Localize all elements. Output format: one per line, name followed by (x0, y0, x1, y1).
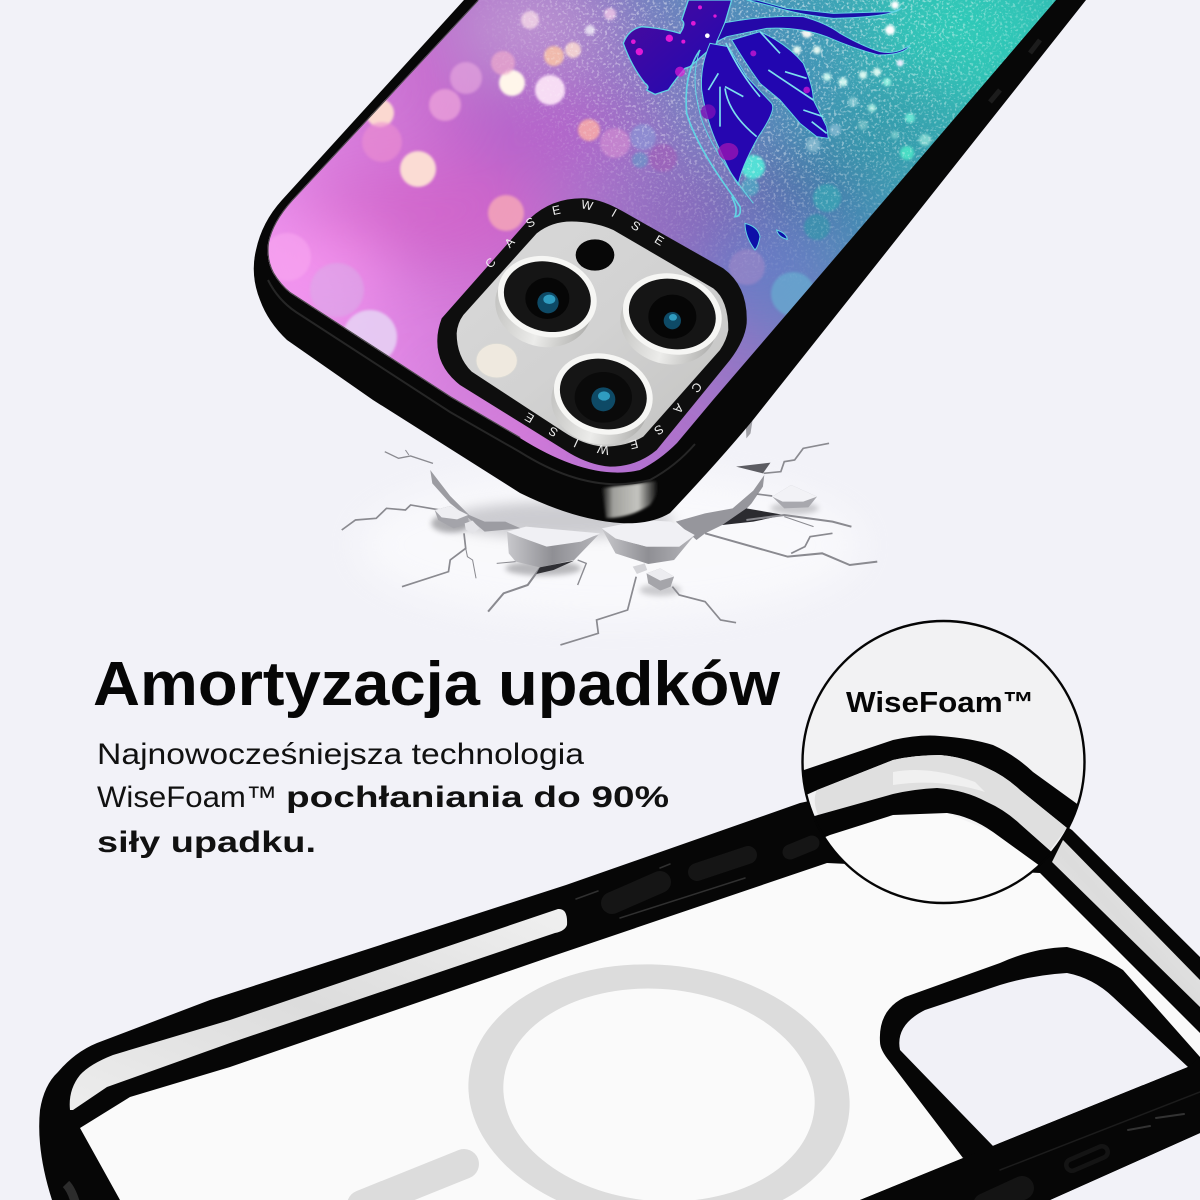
magsafe ring (457, 949, 861, 1200)
phone camera plate (457, 221, 728, 447)
screen edge highlight (268, 0, 520, 438)
foam strip left (70, 909, 567, 1110)
port hole (66, 1184, 76, 1200)
body text: WiseFoam™ (97, 781, 277, 814)
lens C (542, 342, 662, 455)
case glare (602, 481, 658, 518)
camera module brand text, lower: CASEWISE (524, 383, 701, 456)
lens B (611, 262, 731, 375)
magsafe alignment pill (362, 1164, 464, 1200)
lidar sensor (576, 239, 614, 271)
magnified interior (800, 813, 1090, 910)
side buttons (576, 843, 1200, 1200)
camera module brand text, upper: CASEWISE (486, 200, 664, 267)
foam strip right (1052, 840, 1200, 1007)
lower band (860, 1057, 1200, 1200)
glitter screen (268, 0, 1056, 473)
bottom open case (39, 770, 1200, 1200)
camera cut-out frame (880, 947, 1200, 1158)
flash (476, 343, 517, 378)
case interior (80, 863, 1200, 1200)
body text (97, 738, 669, 859)
chunks (435, 506, 469, 528)
magnified foam strip (815, 755, 1067, 850)
case body (254, 0, 1086, 523)
case bevel line (268, 280, 695, 484)
heading: Amortyzacja upadków (93, 650, 781, 719)
magnified inner band (814, 788, 1051, 865)
magnifier callout: WiseFoam (795, 620, 1090, 910)
plate left side (430, 470, 521, 532)
illustration: cracked floor impact (342, 420, 877, 645)
camera module ring (437, 198, 747, 467)
lens A (486, 245, 606, 358)
bokeh lights (263, 1, 931, 364)
body text: Najnowocześniejsza technologia (97, 738, 584, 771)
glitter specks (488, 0, 1054, 270)
magnified outer band (795, 736, 1080, 830)
body text: pochłaniania do 90% (286, 781, 669, 814)
camera module (437, 198, 747, 467)
plate right side (676, 475, 764, 540)
icon: fairy silhouette (623, 0, 910, 250)
case outer frame (39, 770, 1200, 1200)
body text: siły upadku. (97, 826, 316, 859)
camera cut-out (899, 973, 1188, 1146)
callout label: WiseFoam™ (846, 687, 1034, 719)
colour clouds (260, 0, 1050, 484)
